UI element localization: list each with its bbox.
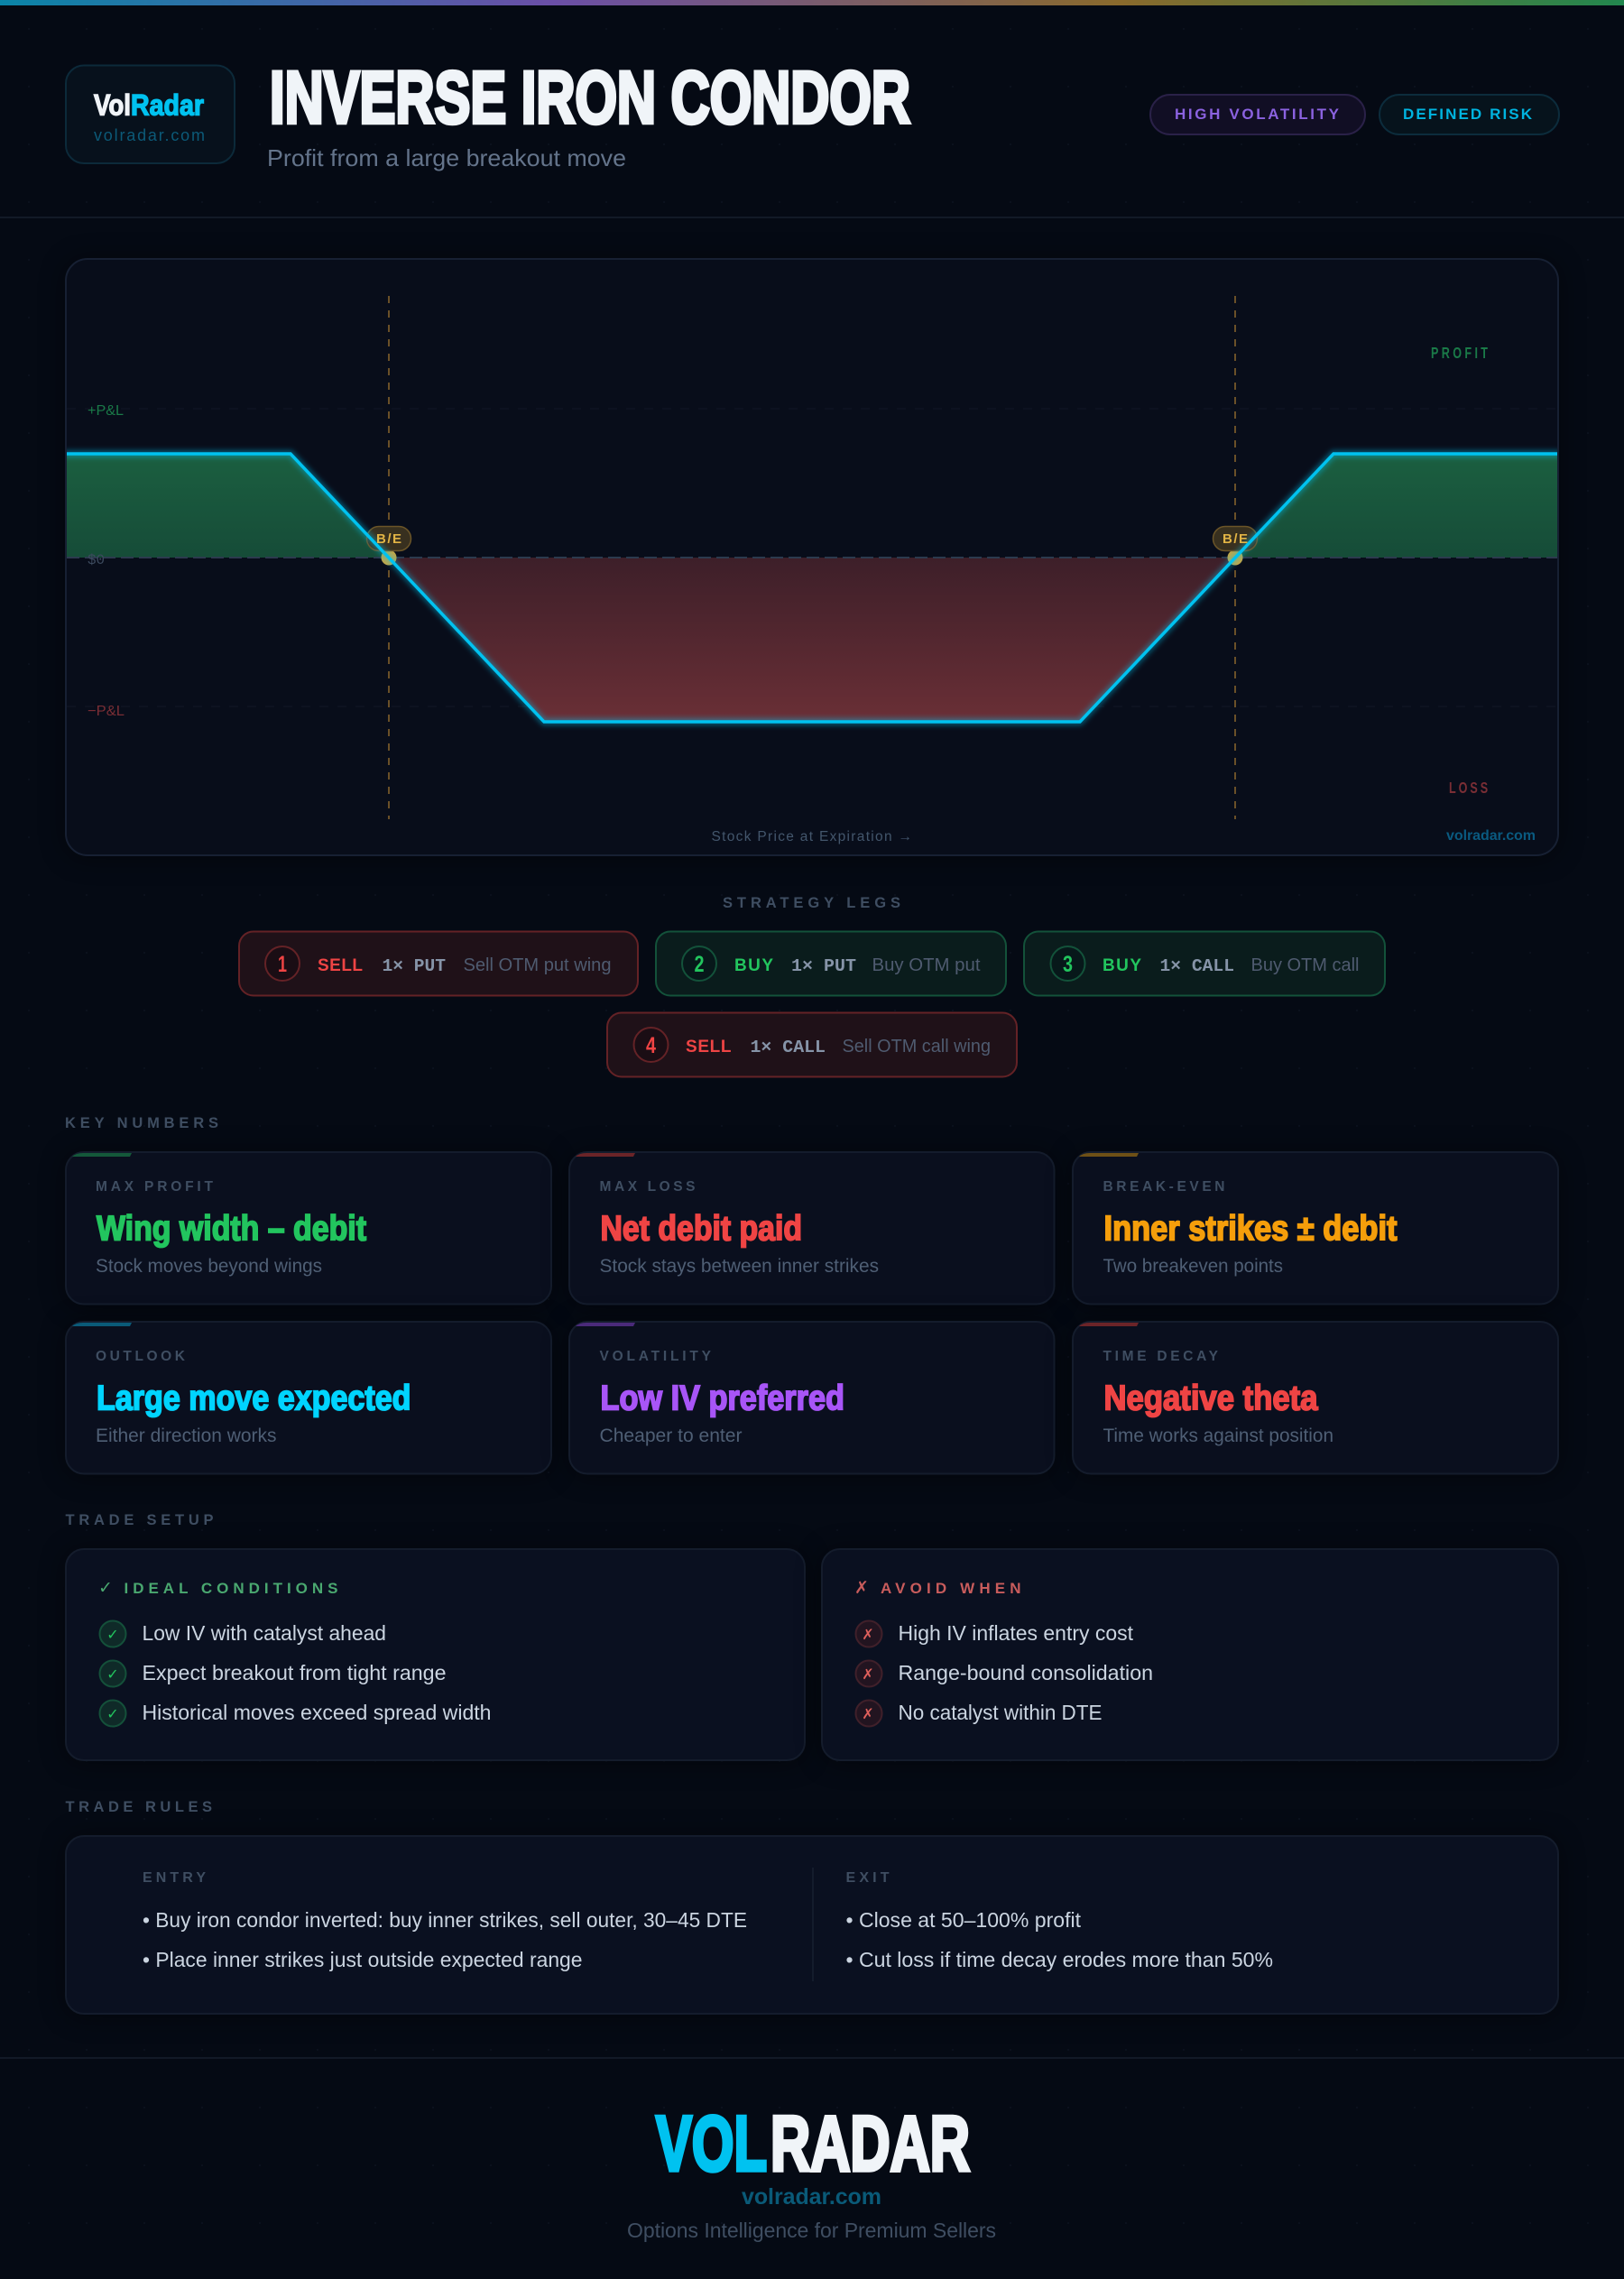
card: volatility xyxy=(569,1322,1054,1474)
card: outlook xyxy=(66,1322,551,1474)
item: low iv: ✓ xyxy=(106,1626,119,1643)
top gradient bar xyxy=(0,0,1624,5)
card: volatility: Cheaper to enter xyxy=(599,1426,742,1446)
item: expect breakout: ✓ xyxy=(106,1665,119,1683)
panel: payoff chart xyxy=(63,259,1561,855)
leg 4: 4 xyxy=(646,1033,656,1058)
leg 1: SELL xyxy=(318,956,363,975)
item: high iv: High IV inflates entry cost xyxy=(899,1621,1134,1645)
subtitle: Profit from a large breakout move xyxy=(267,144,626,171)
exit rules: • Close at 50–100% profit xyxy=(846,1908,1082,1932)
profit label: PROFIT xyxy=(1431,345,1489,363)
header xyxy=(66,57,1559,171)
footer logo: VOL xyxy=(656,2100,767,2187)
panel: ideal conditions: IDEAL CONDITIONS xyxy=(125,1580,337,1597)
footer tagline: Options Intelligence for Premium Sellers xyxy=(627,2219,996,2242)
leg 4 xyxy=(607,1012,1017,1077)
leg 2: 2 xyxy=(695,952,704,977)
footer logo xyxy=(656,2100,970,2187)
item: no catalyst: ✗ xyxy=(862,1705,874,1722)
profit area right xyxy=(1235,454,1557,558)
card: time decay: Time works against position xyxy=(1103,1426,1333,1446)
exit rules xyxy=(846,1870,1273,1971)
card: max profit: Stock moves beyond wings xyxy=(96,1256,322,1277)
entry rules: ENTRY xyxy=(143,1870,206,1886)
profit area left xyxy=(67,454,389,558)
panel: trade rules xyxy=(66,1836,1558,2014)
break-even label right: B/E xyxy=(1223,531,1248,547)
axis label -P&L: −P&L xyxy=(88,704,125,719)
entry rules: • Buy iron condor inverted: buy inner strikes, sell outer, 30–45 DTE xyxy=(143,1908,747,1932)
card: volatility: VOLATILITY xyxy=(599,1349,712,1364)
card: break-even xyxy=(1073,1152,1558,1305)
exit rules: • Cut loss if time decay erodes more than 50% xyxy=(846,1948,1273,1971)
exit rules: EXIT xyxy=(846,1870,890,1886)
card: outlook: Either direction works xyxy=(96,1426,276,1446)
payoff line glow xyxy=(63,454,1561,722)
leg 3 xyxy=(1024,931,1385,996)
card: max loss: Stock stays between inner strikes xyxy=(599,1256,879,1277)
leg 2 xyxy=(656,931,1006,996)
leg 4: 1× CALL xyxy=(751,1038,826,1057)
x axis label: Stock Price at Expiration → xyxy=(711,829,912,844)
item: historical moves: ✓ xyxy=(106,1705,119,1722)
break-even marker right xyxy=(1227,550,1243,565)
item: expect breakout: Expect breakout from tight range xyxy=(143,1661,446,1684)
panel: ideal conditions xyxy=(66,1549,805,1760)
loss area xyxy=(389,558,1235,722)
card: break-even: Two breakeven points xyxy=(1103,1256,1283,1277)
leg 2: Buy OTM put xyxy=(872,955,981,975)
badge: high volatility xyxy=(1150,95,1365,134)
leg 1 xyxy=(239,931,638,996)
card: break-even: Inner strikes ± debit xyxy=(1104,1209,1398,1249)
card: time decay xyxy=(1073,1322,1558,1474)
card: outlook: Large move expected xyxy=(97,1379,411,1418)
panel: avoid when xyxy=(822,1549,1558,1760)
footer xyxy=(627,2100,996,2242)
logo badge: Radar xyxy=(131,88,204,121)
leg 1: Sell OTM put wing xyxy=(464,955,612,975)
card: max profit: Wing width – debit xyxy=(97,1209,366,1249)
card: outlook: OUTLOOK xyxy=(96,1349,186,1364)
heading: strategy legs: STRATEGY LEGS xyxy=(723,895,900,911)
break-even marker left xyxy=(381,550,397,565)
leg 3: 1× CALL xyxy=(1160,956,1234,976)
chart watermark: volradar.com xyxy=(1446,828,1536,844)
leg 1: 1× PUT xyxy=(383,956,446,976)
card: max loss: MAX LOSS xyxy=(599,1179,695,1195)
card: max profit: MAX PROFIT xyxy=(96,1179,214,1195)
panel: avoid when: ✗ xyxy=(854,1578,869,1598)
leg 4: SELL xyxy=(686,1038,732,1056)
leg 4: Sell OTM call wing xyxy=(843,1037,991,1056)
logo badge: volradar.com xyxy=(94,126,205,144)
leg 1: 1 xyxy=(278,952,287,977)
badge: defined risk xyxy=(1379,95,1559,134)
panel: ideal conditions: ✓ xyxy=(98,1578,113,1598)
item: range-bound: Range-bound consolidation xyxy=(899,1661,1153,1684)
heading: trade rules: TRADE RULES xyxy=(65,1799,212,1815)
footer logo: RADAR xyxy=(770,2100,970,2187)
axis label +P&L: +P&L xyxy=(88,403,124,419)
logo badge: Vol xyxy=(94,88,131,121)
leg 3: 3 xyxy=(1063,952,1073,977)
entry rules xyxy=(143,1870,747,1971)
heading: trade setup: TRADE SETUP xyxy=(65,1512,213,1528)
item: low iv: Low IV with catalyst ahead xyxy=(143,1621,386,1645)
item: historical moves: Historical moves exceed spread width xyxy=(143,1701,491,1724)
card: max loss: Net debit paid xyxy=(601,1209,802,1249)
footer url: volradar.com xyxy=(742,2184,881,2210)
card: time decay: TIME DECAY xyxy=(1103,1349,1219,1364)
card: max loss xyxy=(569,1152,1054,1305)
item: high iv: ✗ xyxy=(862,1626,874,1643)
break-even tag right xyxy=(1213,527,1258,550)
panel: avoid when: AVOID WHEN xyxy=(881,1580,1021,1597)
break-even tag left xyxy=(366,527,411,550)
title: INVERSE IRON CONDOR xyxy=(270,57,910,139)
item: range-bound: ✗ xyxy=(862,1665,874,1683)
entry rules: • Place inner strikes just outside expected range xyxy=(143,1948,583,1971)
leg 2: BUY xyxy=(734,956,773,975)
card: max profit xyxy=(66,1152,551,1305)
badge: defined risk: DEFINED RISK xyxy=(1403,106,1533,123)
leg 3: BUY xyxy=(1103,956,1141,975)
payoff line xyxy=(63,454,1561,722)
heading: key numbers: KEY NUMBERS xyxy=(65,1115,218,1131)
badge: high volatility: HIGH VOLATILITY xyxy=(1175,106,1340,123)
item: no catalyst: No catalyst within DTE xyxy=(899,1701,1103,1724)
leg 3: Buy OTM call xyxy=(1250,955,1359,975)
axis label $0: $0 xyxy=(88,552,105,568)
leg 2: 1× PUT xyxy=(791,956,856,976)
card: time decay: Negative theta xyxy=(1104,1379,1318,1418)
break-even label left: B/E xyxy=(376,531,401,547)
card: volatility: Low IV preferred xyxy=(601,1379,844,1418)
logo badge xyxy=(66,65,235,163)
card: break-even: BREAK-EVEN xyxy=(1103,1179,1225,1195)
loss label: LOSS xyxy=(1449,780,1488,798)
